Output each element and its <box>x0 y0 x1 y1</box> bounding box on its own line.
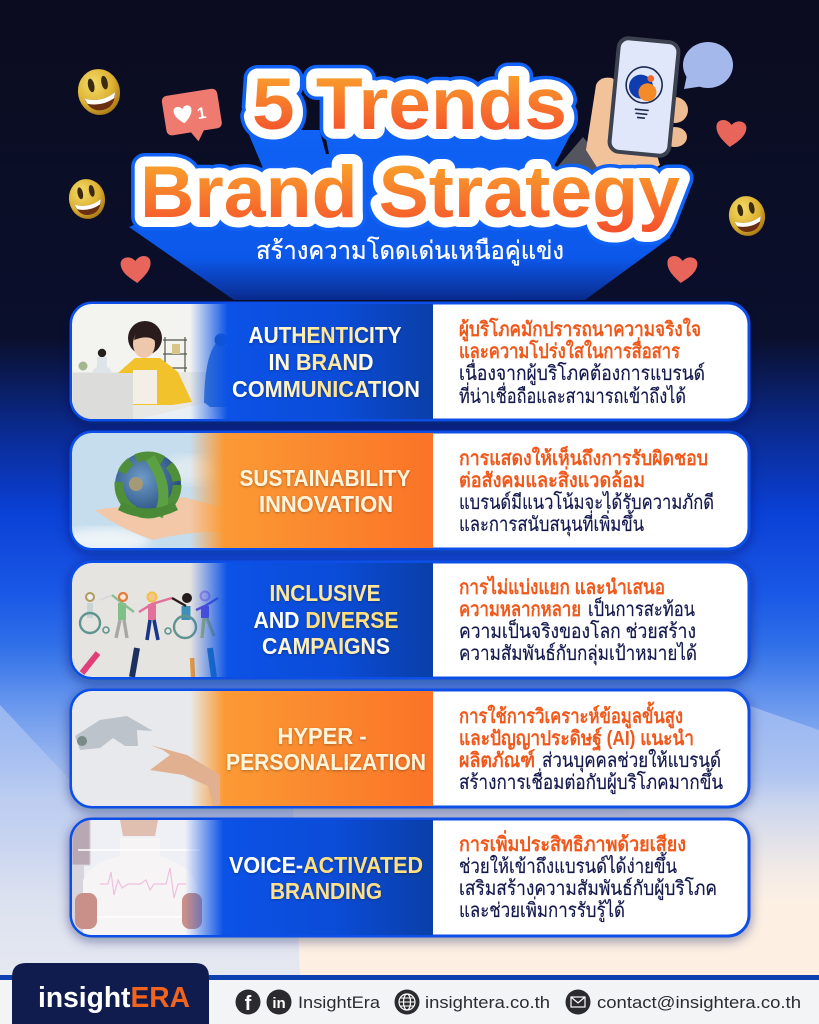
heading background <box>190 433 433 548</box>
heading <box>254 580 398 659</box>
panel: hyper-personalization <box>71 690 749 807</box>
heading background <box>190 691 433 806</box>
description: และปัญญาประดิษฐ์ (AI) แนะนำ <box>459 727 694 752</box>
heading: SUSTAINABILITY <box>240 465 410 491</box>
description: และการสนับสนุนที่เพิ่มขึ้น <box>459 510 644 537</box>
icon: heart upper right <box>715 119 747 148</box>
title <box>140 64 680 233</box>
icon: facebook <box>236 990 260 1015</box>
photo: woman with headset <box>72 304 242 419</box>
heading: AUTHENTICITY <box>248 322 402 348</box>
description: ผู้บริโภคมักปรารถนาความจริงใจ <box>459 317 701 343</box>
photo: paper figures and pencils <box>72 563 242 677</box>
heading: INCLUSIVE <box>270 580 380 606</box>
description: การใช้การวิเคราะห์ข้อมูลขั้นสูง <box>459 701 683 730</box>
description: การเพิ่มประสิทธิภาพด้วยเสียง <box>459 829 686 856</box>
icon: hand holding phone <box>553 37 688 172</box>
description: แบรนด์มีแนวโน้มจะได้รับความภักดี <box>459 491 714 514</box>
heading: HYPER - <box>278 723 366 749</box>
social handle: InsightEra <box>298 993 381 1012</box>
description: ที่น่าเชื่อถือและสามารถเข้าถึงได้ <box>459 382 686 408</box>
description: ต่อสังคมและสิ่งแวดล้อม <box>459 465 645 492</box>
description: เนื่องจากผู้บริโภคต้องการแบรนด์ <box>459 359 705 386</box>
panel: voice-activated branding <box>71 819 749 936</box>
icon: linkedin: in <box>272 995 286 1012</box>
icon: chat bubble <box>683 42 733 89</box>
logo block <box>12 963 209 1024</box>
title outline: Brand Strategy: Brand Strategy <box>140 152 680 233</box>
heading <box>240 465 410 517</box>
heading background <box>185 820 433 935</box>
heading: IN BRAND <box>268 349 374 375</box>
photo: globe in hand <box>72 433 222 548</box>
title outline: 5 Trends: 5 Trends <box>252 64 567 145</box>
icon: smiling emoji right <box>725 193 769 239</box>
heading <box>229 852 423 904</box>
icon: linkedin <box>266 990 292 1014</box>
icon: facebook: f <box>245 993 252 1015</box>
description <box>459 445 714 537</box>
email: contact@insightera.co.th <box>597 993 801 1012</box>
heading background <box>190 304 433 419</box>
description: เสริมสร้างความสัมพันธ์กับผู้บริโภค <box>459 877 717 901</box>
heading <box>226 723 426 775</box>
description: ช่วยให้เข้าถึงแบรนด์ได้ง่ายขึ้น <box>459 852 677 878</box>
heading: CAMPAIGNS <box>262 633 390 659</box>
description <box>459 829 717 923</box>
description: การแสดงให้เห็นถึงการรับผิดชอบ <box>459 445 708 470</box>
icon: heart lower right <box>666 255 698 284</box>
description: เป็นการสะท้อน <box>588 596 695 621</box>
panel: authenticity in brand communication <box>71 303 749 420</box>
icon: like badge <box>161 88 224 146</box>
heading: AND DIVERSE <box>254 607 398 633</box>
heading: VOICE-ACTIVATED <box>229 852 423 878</box>
icon: smiling emoji left top <box>74 65 124 119</box>
icon: heart lower left <box>120 255 152 284</box>
description: ความหลากหลาย <box>459 599 581 621</box>
photo: robot and human hands <box>72 691 222 806</box>
icon: like badge: 1 <box>196 105 208 123</box>
heading: PERSONALIZATION <box>226 749 426 775</box>
panel: inclusive and diverse campaigns <box>71 562 749 678</box>
description <box>459 317 705 408</box>
footer <box>0 963 819 1024</box>
website: insightera.co.th <box>425 993 550 1012</box>
description: ส่วนบุคคลช่วยให้แบรนด์ <box>542 749 721 773</box>
heading background <box>190 563 433 677</box>
subtitle: สร้างความโดดเด่นเหนือคู่แข่ง <box>256 236 564 266</box>
description <box>459 575 697 666</box>
description: ความสัมพันธ์กับกลุ่มเป้าหมายได้ <box>459 642 697 666</box>
title backdrop beam <box>129 130 671 300</box>
title line: 5 Trends: 5 Trends <box>252 64 567 145</box>
panel: sustainability innovation <box>60 432 749 552</box>
heading <box>232 322 420 402</box>
icon: smiling emoji left <box>65 176 109 222</box>
logo block: insightERA <box>38 982 190 1014</box>
heading: COMMUNICATION <box>232 376 420 402</box>
heading: INNOVATION <box>259 491 393 517</box>
photo: human hand <box>150 745 220 805</box>
description: สร้างการเชื่อมต่อกับผู้บริโภคมากขึ้น <box>459 768 723 795</box>
slit in beam <box>301 62 329 154</box>
description: ความเป็นจริงของโลก ช่วยสร้าง <box>459 618 696 643</box>
title line: Brand Strategy: Brand Strategy <box>140 152 680 233</box>
description: การไม่แบ่งแยก และนำเสนอ <box>459 575 665 599</box>
photo: woman with voice waveform <box>72 820 222 935</box>
heading: BRANDING <box>270 878 382 904</box>
icon: globe <box>394 990 420 1014</box>
description: และความโปร่งใสในการสื่อสาร <box>459 336 680 363</box>
icon: mail <box>566 990 590 1014</box>
description: และช่วยเพิ่มการรับรู้ได้ <box>459 896 625 923</box>
description: ผลิตภัณฑ์ <box>459 749 535 772</box>
description <box>459 701 723 795</box>
